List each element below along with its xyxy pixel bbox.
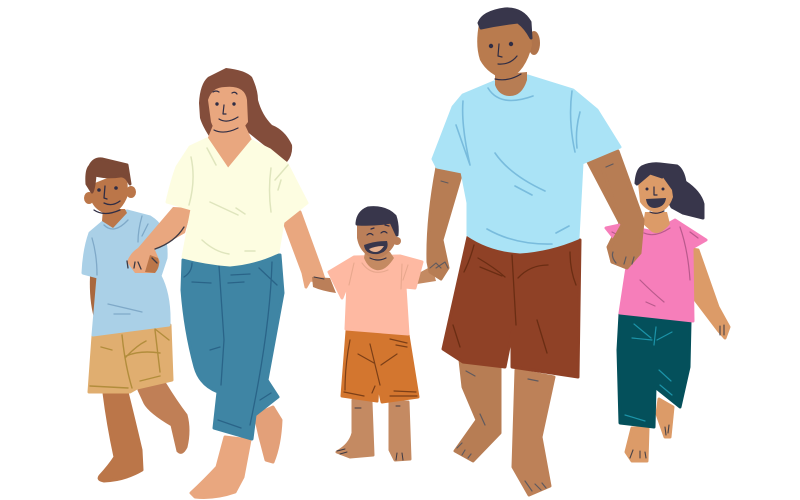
mother face <box>208 87 248 134</box>
father left leg <box>455 360 500 461</box>
figure: mother <box>127 68 325 497</box>
girl hair <box>636 164 703 218</box>
figure: boy on left <box>83 159 188 481</box>
girl head <box>637 172 673 213</box>
toddler t-shirt <box>329 256 422 334</box>
boy t-shirt <box>83 211 169 335</box>
boy back leg <box>139 384 188 452</box>
mother blouse <box>167 139 307 265</box>
boy left arm <box>90 276 99 318</box>
mother left arm <box>127 207 192 273</box>
boy front leg <box>99 392 142 481</box>
toddler right leg <box>390 402 410 460</box>
father hand over girl <box>603 160 643 268</box>
boy shorts <box>89 325 172 392</box>
girl front foot <box>626 428 648 461</box>
father right leg <box>513 370 554 495</box>
toddler left arm <box>312 277 336 293</box>
father t-shirt <box>433 76 620 252</box>
mother back leg <box>255 407 281 462</box>
figure: father <box>428 9 643 495</box>
boy hand held <box>145 255 159 273</box>
girl right arm <box>691 249 729 338</box>
toddler head <box>357 208 401 260</box>
toddler neck <box>364 252 394 270</box>
girl back foot <box>657 399 673 437</box>
mother jeans <box>182 255 283 439</box>
girl blouse <box>606 220 706 321</box>
father neck <box>495 72 527 96</box>
toddler left leg <box>337 400 373 457</box>
girl neck <box>643 212 670 233</box>
mother right arm <box>284 212 325 287</box>
figure: girl on right <box>603 160 729 461</box>
toddler right arm <box>415 266 436 284</box>
boy head <box>84 159 136 215</box>
father left arm <box>428 167 462 279</box>
mother hair <box>199 68 292 162</box>
mother face details <box>213 91 238 132</box>
boy neck <box>102 209 127 228</box>
father shorts <box>443 237 580 377</box>
father right arm <box>588 151 643 268</box>
father head <box>477 9 540 80</box>
girl pants <box>618 314 690 427</box>
toddler shorts <box>342 331 418 402</box>
mother neck <box>207 125 252 170</box>
mother front leg <box>191 437 250 497</box>
figure: toddler in middle <box>312 208 436 460</box>
